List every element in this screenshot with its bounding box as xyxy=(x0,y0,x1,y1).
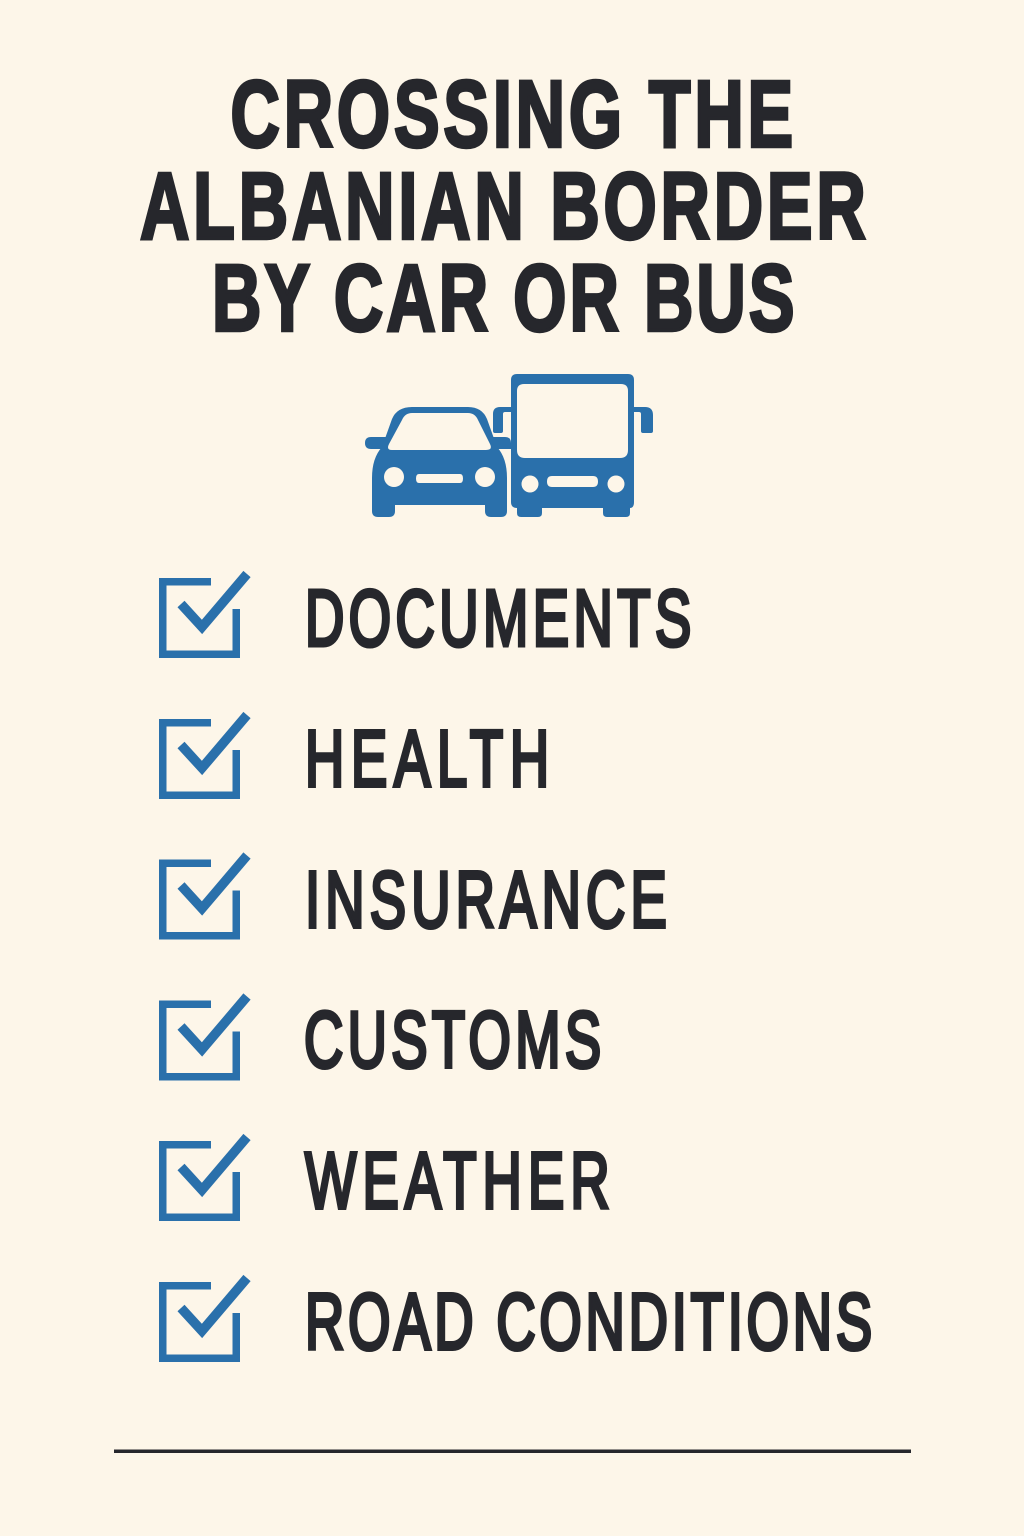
list item: health xyxy=(163,715,549,804)
list item: customs xyxy=(163,996,601,1085)
list item: road conditions: ROAD CONDITIONS xyxy=(305,1278,872,1367)
title xyxy=(140,60,866,351)
title: BY CAR OR BUS xyxy=(212,244,794,351)
icon: car and bus xyxy=(365,374,653,517)
title: ALBANIAN BORDER xyxy=(140,152,866,259)
list item: weather xyxy=(163,1137,610,1226)
checklist xyxy=(163,574,872,1367)
icon: bus xyxy=(493,374,653,517)
list item: weather: WEATHER xyxy=(305,1137,610,1226)
footer rule xyxy=(114,1450,911,1453)
list item: insurance: INSURANCE xyxy=(305,856,667,945)
list item: health: HEALTH xyxy=(305,715,549,804)
list item: documents: DOCUMENTS xyxy=(305,574,691,663)
title: CROSSING THE xyxy=(230,60,793,167)
icon: car xyxy=(365,407,511,517)
list item: customs: CUSTOMS xyxy=(304,996,601,1085)
